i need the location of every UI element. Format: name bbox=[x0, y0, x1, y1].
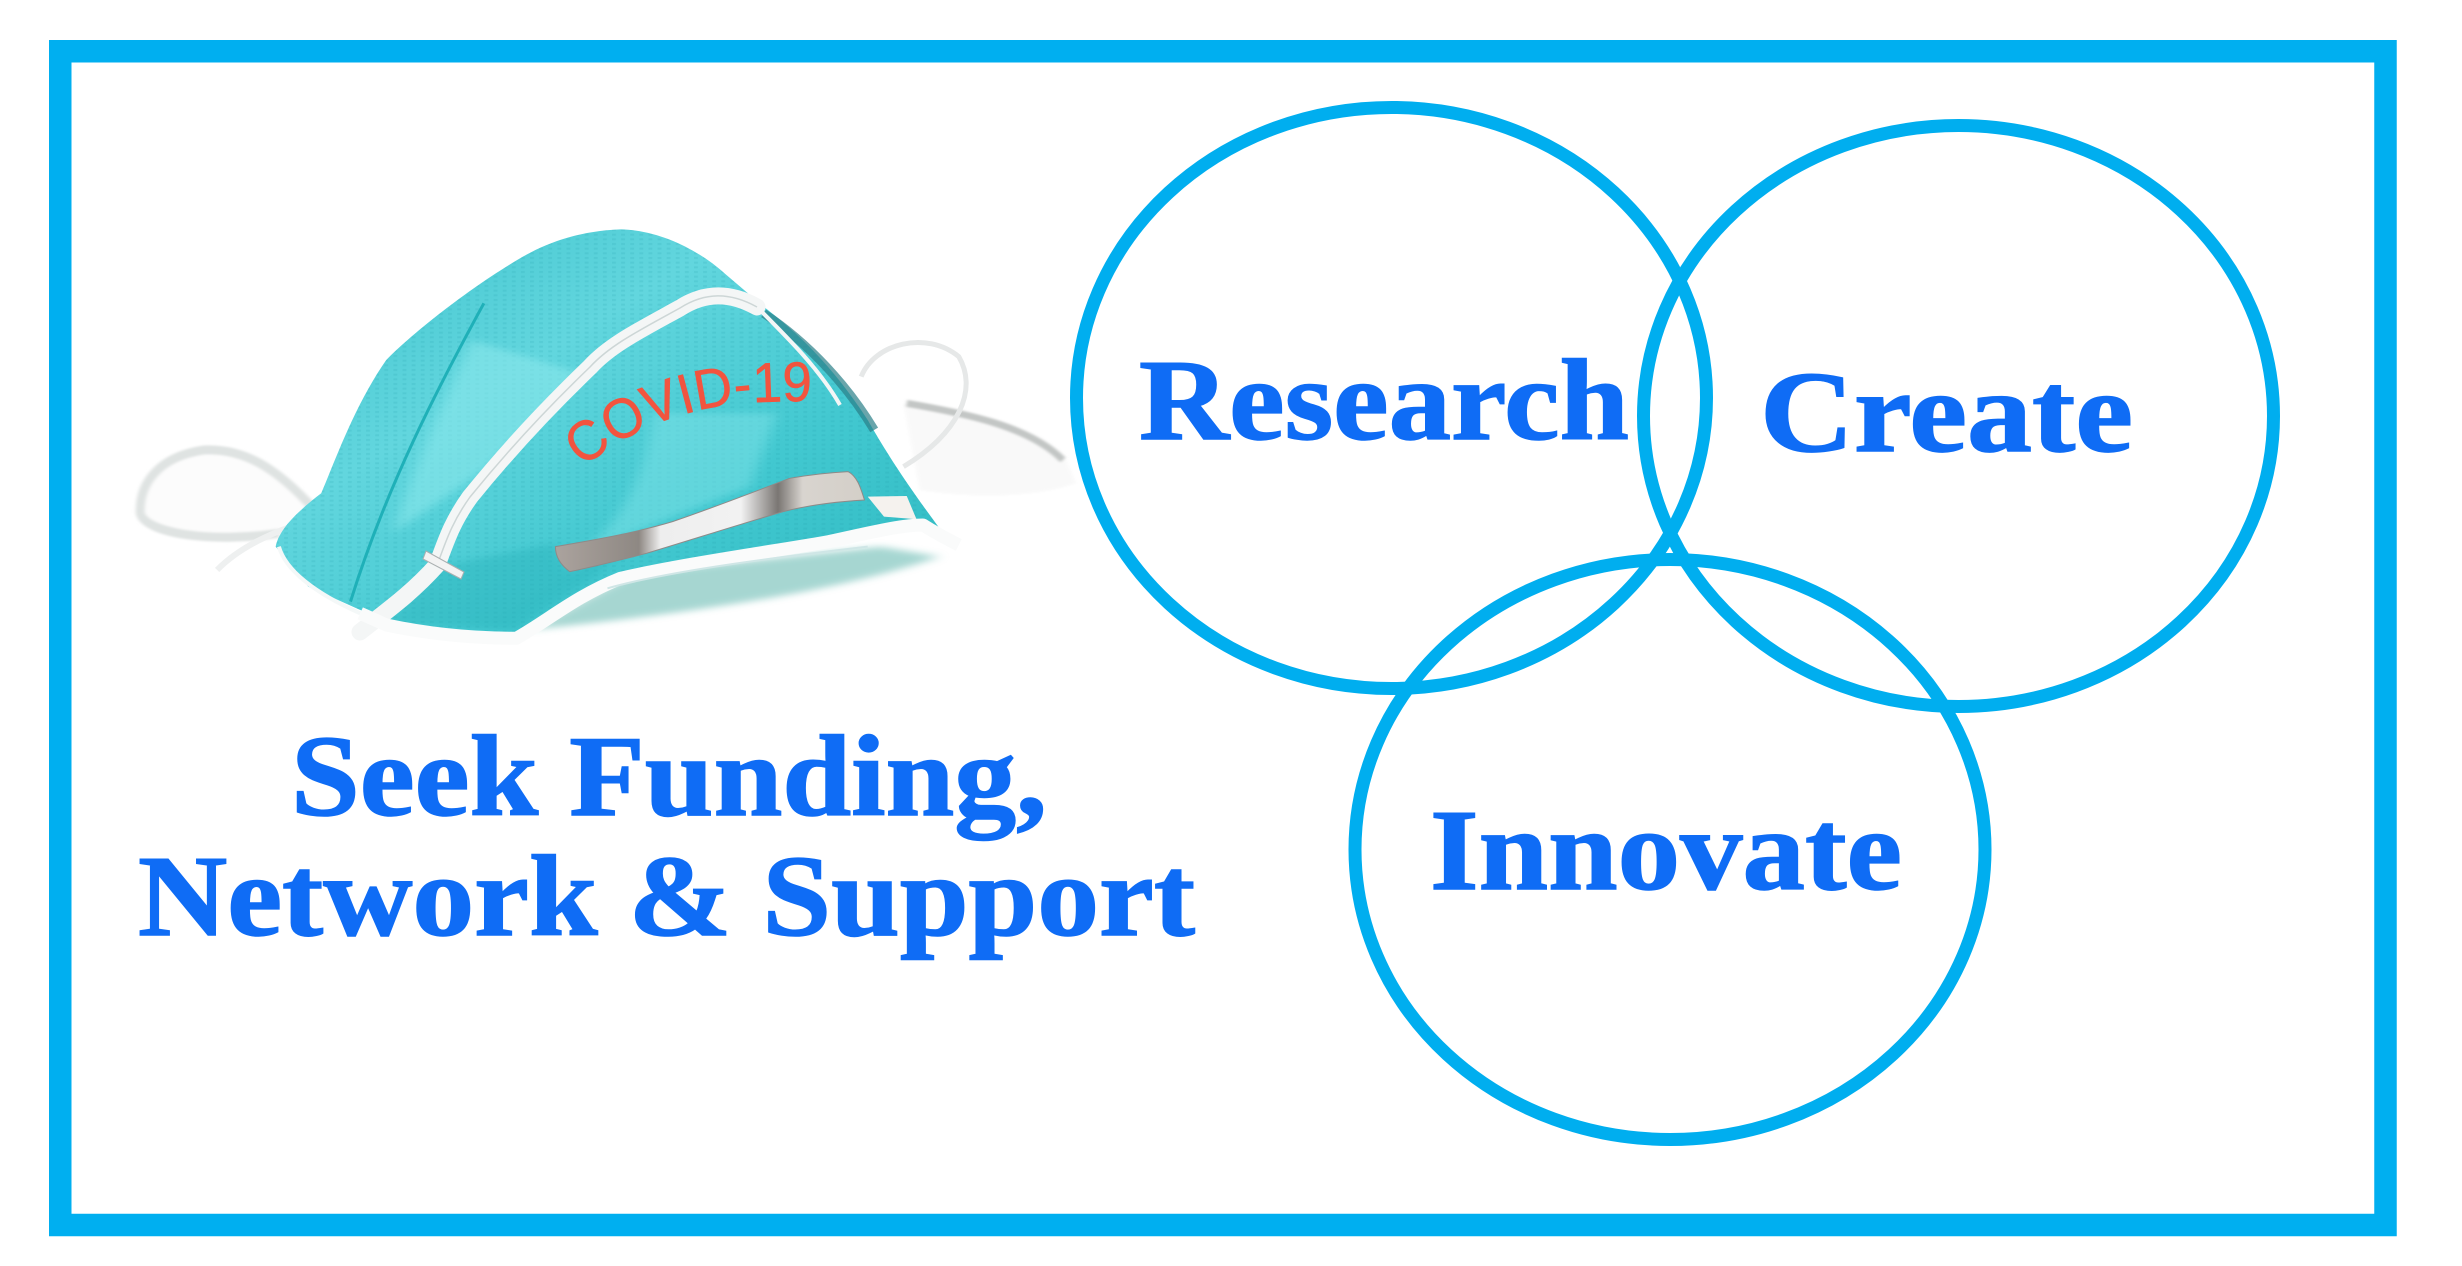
circle: Research bbox=[1076, 108, 1706, 688]
mask binding edge bbox=[279, 496, 959, 638]
circle: Research: Research bbox=[1139, 337, 1629, 465]
venn diagram bbox=[1076, 108, 2274, 1140]
mask white strap bbox=[360, 296, 840, 632]
mask body bbox=[276, 229, 946, 640]
mask floor shadow bbox=[529, 547, 939, 630]
mask ear loops bbox=[140, 342, 1076, 570]
mask metal nose strip bbox=[555, 472, 864, 572]
image: COVID-19 face mask bbox=[134, 229, 1116, 640]
circle: Create bbox=[1644, 126, 2274, 706]
circle: Create: Create bbox=[1760, 349, 2133, 477]
circle: Innovate: Innovate bbox=[1430, 787, 1902, 915]
heading: Seek Funding, Network & Support: Seek Funding, bbox=[291, 713, 1047, 841]
circle: Innovate bbox=[1355, 560, 1985, 1140]
mask lettering: COVID-19 bbox=[568, 362, 810, 460]
heading: Seek Funding, Network & Support bbox=[138, 713, 1195, 961]
heading: Seek Funding, Network & Support: Network & Support bbox=[138, 833, 1195, 961]
